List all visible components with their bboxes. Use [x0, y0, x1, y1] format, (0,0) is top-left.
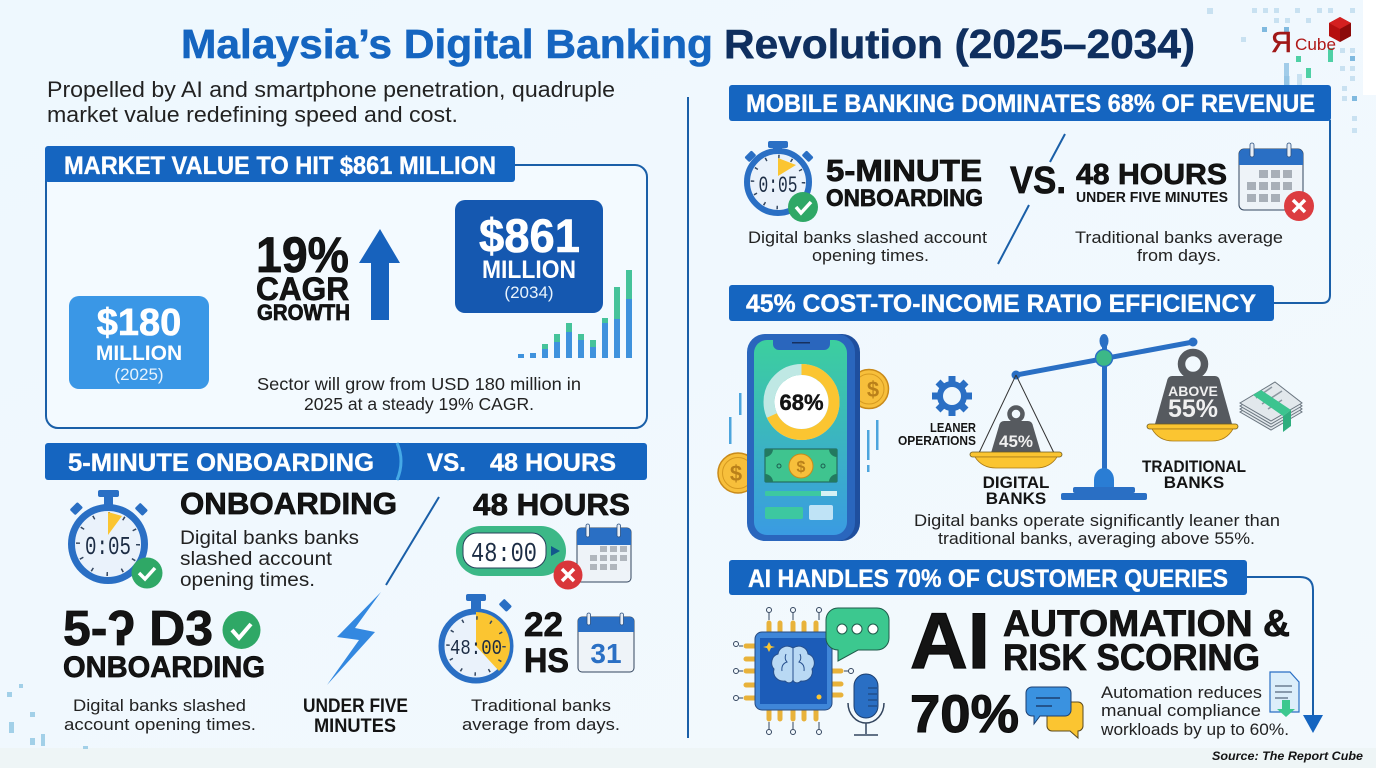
card: $861 million 2034: MILLION	[482, 256, 576, 284]
text: traditional banks caption	[1075, 228, 1283, 265]
heading: mobile banking: MOBILE BANKING DOMINATES 68% OF REVENUE	[746, 90, 1315, 118]
text: 70%: 70%	[910, 685, 1019, 744]
text: automation and risk scoring: RISK SCORING	[1003, 637, 1260, 678]
heading: onboarding comparison: VS.	[427, 449, 466, 477]
icon: smartphone 68%	[747, 334, 860, 541]
icon: lightning bolt	[327, 592, 381, 685]
icon: coins: $	[867, 377, 879, 402]
weight: digital banks 45%: 45%	[999, 432, 1033, 451]
icon: green check	[222, 611, 260, 649]
bar chart: growth bars	[518, 270, 632, 358]
text: traditional banks: Traditional banks	[471, 696, 611, 715]
text: automation reduces: workloads by up to 60%.	[1100, 721, 1289, 739]
text: digital banks slashed	[64, 696, 256, 734]
text: 48 hours	[1076, 159, 1228, 206]
panel: cost-to-income	[718, 285, 1302, 548]
text: 22 HS: 22	[524, 606, 563, 644]
title	[181, 21, 1195, 67]
source: Source: The Report Cube	[1212, 749, 1363, 763]
text: leaner operations: OPERATIONS	[898, 434, 976, 448]
panel: onboarding vs 48 hours	[45, 443, 647, 737]
arrow: growth	[359, 229, 400, 320]
text: automation and risk scoring: AUTOMATION &	[1003, 603, 1290, 644]
card: $861 million 2034	[455, 200, 603, 313]
text: digital banks slashed: Digital banks slashed	[73, 696, 246, 715]
text: sector growth: 2025 at a steady 19% CAGR.	[304, 394, 534, 414]
text: onboarding big: ONBOARDING	[63, 651, 265, 684]
text: digital banks caption	[748, 228, 987, 265]
text: automation reduces: manual compliance	[1101, 702, 1261, 720]
text: traditional banks label: TRADITIONAL	[1142, 457, 1246, 476]
icon: motion dashes	[729, 393, 878, 472]
heading: onboarding comparison	[45, 443, 647, 480]
icon: smartphone 68%: 68%	[779, 390, 824, 415]
heading: onboarding comparison: 5-MINUTE ONBOARDING	[68, 449, 374, 477]
panel: mobile banking	[729, 85, 1331, 265]
icon: balance scale	[970, 334, 1238, 500]
icon: 48:00 timer with calendar: 48:00	[471, 540, 537, 570]
weight: digital banks 45%	[991, 408, 1041, 453]
heading: cost-to-income: 45% COST-TO-INCOME RATIO EFFICIENCY	[746, 290, 1256, 318]
text: 22 HS: HS	[524, 642, 569, 680]
arrow: down to compliance	[1303, 715, 1323, 733]
text: automation reduces: Automation reduces	[1101, 684, 1262, 702]
title: Revolution (2025–2034)	[724, 21, 1195, 67]
icon: coins: $	[730, 461, 742, 486]
callout: 19% CAGR growth	[256, 227, 350, 325]
title: Malaysia’s Digital Banking	[181, 21, 713, 67]
icon: calendar with x	[1239, 143, 1314, 221]
icon: stopwatch 0:05: 0:05	[85, 532, 131, 562]
text: under five minutes: MINUTES	[314, 716, 396, 737]
icon: gear	[932, 376, 972, 416]
card: $180 million 2025	[69, 296, 209, 389]
text: digital banks caption: Digital banks slashed account	[748, 228, 987, 247]
text: VS: VS.	[1010, 160, 1066, 202]
logo: report cube: Я	[1271, 27, 1292, 59]
text: onboarding	[180, 486, 397, 591]
card: $180 million 2025: MILLION	[96, 342, 182, 365]
weight: traditional banks above 55%: 55%	[1168, 395, 1218, 423]
icon: stopwatch 0:05: 0:05	[758, 173, 798, 199]
text: leaner caption	[914, 511, 1280, 548]
card: $180 million 2025: (2025)	[114, 365, 164, 384]
text: 5-minute onboarding: ONBOARDING	[826, 185, 983, 212]
intro text: market value redefining speed and cost.	[47, 102, 458, 127]
callout: 19% CAGR growth: CAGR	[256, 271, 349, 307]
panel: AI automation	[729, 560, 1323, 744]
icon: calendar 31: 31	[590, 638, 622, 669]
icon: stopwatch 48:00	[442, 594, 512, 680]
icon: 48:00 timer with calendar	[456, 524, 631, 590]
icon: microphone	[848, 674, 884, 735]
text: sector growth	[257, 374, 581, 414]
icon: document with arrow	[1270, 672, 1299, 717]
text: 48 hours: UNDER FIVE MINUTES	[1076, 189, 1228, 206]
text: onboarding: ONBOARDING	[180, 486, 397, 521]
heading: AI queries: AI HANDLES 70% OF CUSTOMER QUERIES	[748, 565, 1228, 593]
text: traditional banks: average from days.	[462, 715, 620, 734]
text: 5-minute onboarding: 5-MINUTE	[826, 153, 982, 188]
intro text: Propelled by AI and smartphone penetration, quadruple	[47, 77, 615, 102]
icon: calendar 31	[578, 613, 634, 672]
text: traditional banks caption: from days.	[1137, 246, 1221, 265]
text: traditional banks caption: Traditional banks average	[1075, 228, 1283, 247]
icon: AI chip with brain	[734, 608, 854, 734]
text: 5-minute code: 5-ʔ D3	[63, 602, 213, 656]
text: onboarding: slashed account	[180, 549, 333, 570]
icon: stopwatch 0:05	[744, 141, 818, 222]
text: 48 hours: 48 HOURS	[1076, 159, 1227, 191]
text: automation reduces	[1100, 684, 1289, 739]
text: 48 hours: 48 HOURS	[473, 487, 630, 522]
logo: report cube: Cube	[1295, 35, 1336, 54]
text: onboarding: opening times.	[180, 570, 315, 591]
text: onboarding: Digital banks banks	[180, 528, 359, 549]
heading: market value: MARKET VALUE TO HIT $861 MILLION	[64, 152, 496, 180]
text: digital banks label: DIGITAL	[983, 473, 1049, 492]
icon: stopwatch 0:05	[70, 490, 162, 588]
connector lines: right panel	[1247, 120, 1330, 716]
heading: onboarding comparison: 48 HOURS	[490, 449, 616, 477]
icon: stopwatch 48:00: 48:00	[450, 638, 502, 661]
text: leaner caption: traditional banks, averaging above 55%.	[938, 529, 1255, 548]
text: automation and risk scoring	[1003, 603, 1290, 678]
text: leaner operations	[898, 421, 976, 448]
text: traditional banks label: BANKS	[1164, 473, 1224, 492]
icon: money stack	[1240, 382, 1302, 432]
text: sector growth: Sector will grow from USD 180 million in	[257, 374, 581, 394]
text: traditional banks	[462, 696, 620, 734]
card: $180 million 2025: $180	[97, 302, 181, 344]
text: digital banks slashed: account opening times.	[64, 715, 256, 734]
text: leaner caption: Digital banks operate significantly leaner than	[914, 511, 1280, 530]
logo: report cube	[1271, 17, 1351, 59]
text: 5-minute onboarding	[826, 153, 983, 212]
text: traditional banks label	[1142, 457, 1246, 492]
icon: chat bubble	[826, 608, 889, 661]
weight: traditional banks above 55%: ABOVE	[1168, 383, 1218, 399]
icon: coins	[718, 370, 888, 493]
text: digital banks caption: opening times.	[812, 246, 929, 265]
callout: 19% CAGR growth: GROWTH	[257, 300, 350, 325]
text: digital banks label	[983, 473, 1049, 508]
card: $861 million 2034: $861	[479, 209, 580, 262]
panel: market value	[45, 146, 647, 428]
text: digital banks label: BANKS	[986, 489, 1046, 508]
intro text	[47, 77, 615, 127]
text: AI: AI	[910, 596, 990, 685]
card: $861 million 2034: (2034)	[504, 283, 554, 302]
icon: chat bubbles	[1026, 687, 1083, 738]
callout: 19% CAGR growth: 19%	[256, 227, 349, 283]
icon: smartphone 68%: $	[797, 459, 806, 476]
text: 22 HS	[524, 606, 569, 680]
weight: traditional banks above 55%	[1155, 352, 1232, 424]
text: under five minutes: UNDER FIVE	[303, 696, 408, 717]
text: under five minutes	[303, 696, 408, 737]
text: leaner operations: LEANER	[930, 421, 976, 435]
